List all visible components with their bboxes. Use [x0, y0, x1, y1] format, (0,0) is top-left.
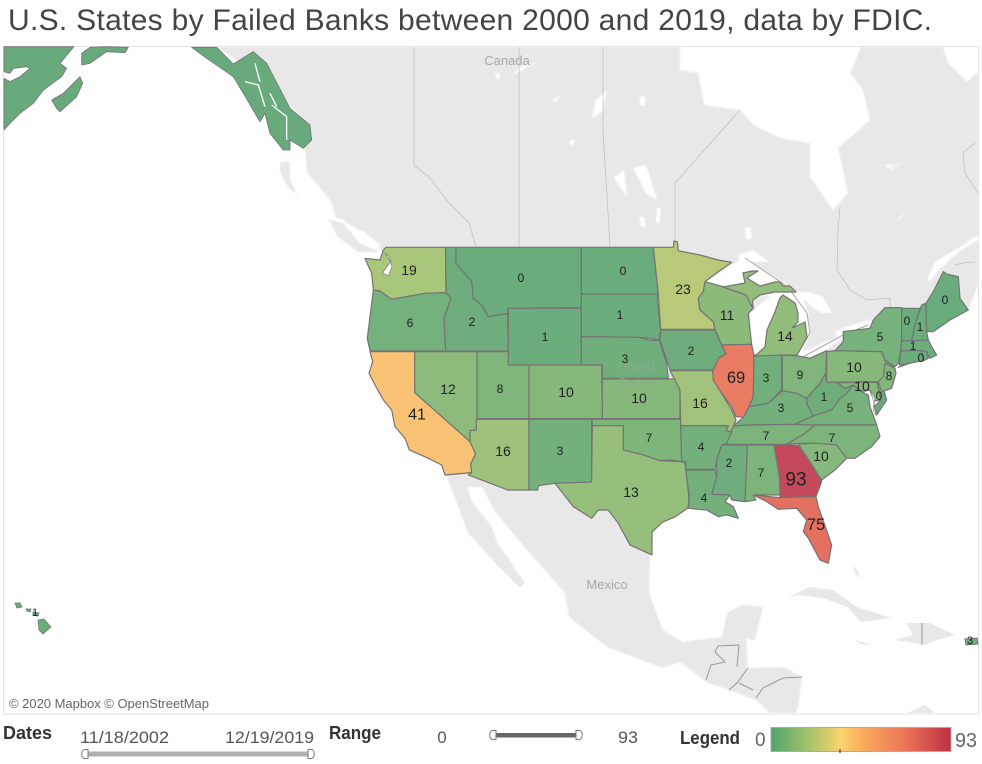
Michigan lower peninsula: [755, 295, 807, 356]
value labels per state: 10: [846, 359, 862, 375]
Maryland: [837, 382, 881, 401]
Virginia: [795, 385, 877, 425]
basemap: Caribbean islands: [788, 566, 955, 713]
Chesapeake Bay: [871, 391, 876, 415]
value labels per state: 14: [777, 328, 793, 344]
value labels per state: 3: [557, 444, 564, 458]
Kansas: [602, 379, 680, 419]
Kentucky: [733, 391, 813, 426]
Texas: [555, 426, 689, 555]
Washington: [365, 247, 446, 299]
Massachusetts: [901, 340, 937, 358]
Puget Sound: [383, 253, 392, 276]
Idaho: [444, 247, 508, 351]
value labels per state: 8: [886, 369, 893, 383]
value labels per state: 7: [763, 429, 770, 443]
value labels per state: 1: [617, 308, 624, 322]
value labels per state: 10: [854, 378, 870, 394]
Wisconsin: [698, 282, 753, 345]
Michigan: [723, 271, 807, 356]
control: dates filter: 12/19/2019: [225, 728, 314, 747]
basemap: Canadian lakes and bays: [328, 60, 978, 282]
West Virginia: [807, 373, 853, 416]
value labels per state: 4: [698, 440, 705, 454]
map labels: countries: Mexico: [586, 577, 628, 592]
map labels: countries: Canada: [484, 53, 531, 68]
Kodiak: [52, 77, 83, 112]
attribution: © 2020 Mapbox © OpenStreetMap: [9, 696, 209, 711]
Oklahoma: [592, 419, 682, 462]
New Jersey: [878, 363, 896, 392]
contiguous states, eastern group: [653, 241, 968, 563]
value labels per state: 41: [408, 406, 426, 424]
panhandle channels: [245, 63, 287, 140]
great lakes: [706, 258, 873, 358]
Montana: [456, 247, 581, 317]
value labels per state: 0: [918, 351, 925, 365]
Vermont: [902, 308, 920, 341]
basemap: Vancouver Island: [328, 218, 380, 252]
California: [369, 352, 476, 475]
Georgia: [774, 445, 822, 498]
basemap: province and country borders: [414, 47, 978, 698]
Florida: [753, 495, 832, 563]
Maine: [926, 272, 968, 332]
Nebraska: [581, 337, 668, 378]
value labels per state: 0: [876, 389, 883, 403]
value labels per state: 9: [797, 368, 804, 382]
control: range filter: Range: [329, 723, 381, 743]
legend: 93: [955, 730, 977, 752]
value labels per state: 0: [518, 271, 525, 285]
value labels per state: 7: [646, 431, 653, 445]
Nevada: [415, 352, 477, 442]
Hawaii: [15, 603, 51, 634]
Oregon: [367, 290, 451, 351]
value labels per state: 0: [942, 293, 949, 307]
value labels per state: 3: [967, 635, 973, 647]
Louisiana: [686, 470, 738, 518]
value labels per state: 75: [807, 516, 825, 534]
control: range filter: 93: [618, 728, 638, 747]
value labels per state: 4: [701, 491, 708, 505]
basemap: Haida Gwaii: [280, 162, 298, 195]
value labels per state: 16: [495, 443, 511, 459]
value labels per state: 10: [558, 384, 574, 400]
Iowa: [660, 330, 726, 370]
value labels per state: [32, 262, 973, 647]
value labels per state: 5: [847, 401, 854, 415]
New Mexico: [529, 419, 592, 490]
value labels per state: 0: [620, 264, 627, 278]
value labels per state: 6: [407, 316, 414, 330]
Arizona: [468, 419, 529, 490]
value labels per state: 23: [675, 281, 691, 297]
Rhode Island: [922, 351, 928, 361]
map labels: countries: States: [618, 375, 655, 390]
Alabama: [745, 445, 780, 502]
control: range filter: [329, 723, 638, 747]
title: U.S. States by Failed Banks between 2000 and 2019, data by FDIC.: [8, 4, 932, 37]
Alaska mainland: [4, 47, 74, 130]
Illinois: [713, 344, 754, 417]
value labels per state: 1: [542, 330, 549, 344]
value labels per state: 8: [497, 382, 504, 396]
basemap: Canada land: [217, 47, 978, 420]
value labels per state: 19: [401, 262, 417, 278]
South Carolina: [798, 443, 847, 480]
value labels per state: 3: [763, 371, 770, 385]
Alaska Kenai coast: [82, 47, 128, 65]
value labels per state: 2: [469, 315, 476, 329]
map labels: countries: [484, 53, 655, 592]
Alaska: [4, 47, 312, 150]
value labels per state: 11: [720, 307, 734, 323]
value labels per state: 10: [813, 448, 829, 464]
value labels per state: 3: [778, 401, 785, 415]
Mississippi: [712, 445, 747, 502]
map labels: countries: United: [617, 358, 655, 373]
control: dates filter: 11/18/2002: [80, 728, 169, 747]
Connecticut: [899, 351, 923, 365]
Pennsylvania: [827, 351, 894, 382]
value labels per state: 5: [877, 330, 884, 344]
North Dakota: [581, 247, 658, 294]
control: range filter: 0: [437, 728, 447, 747]
value labels per state: 12: [440, 381, 456, 397]
value labels per state: 3: [622, 352, 629, 366]
Utah: [477, 352, 529, 419]
control: dates filter: [3, 723, 314, 758]
Tennessee: [726, 424, 815, 444]
value labels per state: 69: [727, 369, 745, 387]
Colorado: [529, 365, 602, 419]
value labels per state: 13: [623, 484, 639, 500]
Long Island: [898, 361, 917, 367]
Wyoming: [508, 308, 581, 365]
value labels per state: 1: [910, 339, 917, 353]
Alaska panhandle: [192, 47, 312, 150]
legend: Legend: [680, 728, 740, 748]
value labels per state: 93: [785, 470, 807, 490]
value labels per state: 0: [904, 314, 911, 328]
value labels per state: 7: [829, 431, 836, 445]
value labels per state: 10: [631, 390, 647, 406]
value labels per state: 16: [692, 395, 708, 411]
Michigan upper peninsula: [723, 271, 796, 307]
Arkansas: [681, 426, 732, 469]
North Carolina: [787, 425, 880, 458]
South Dakota: [581, 294, 661, 340]
value labels per state: 2: [726, 456, 733, 470]
value labels per state: 7: [758, 466, 765, 480]
New Hampshire: [912, 303, 928, 341]
value labels per state: 1: [917, 320, 924, 334]
legend: [680, 728, 977, 753]
Delaware and Delmarva: [874, 382, 887, 415]
Puerto Rico: [965, 638, 978, 645]
legend: 0: [755, 730, 766, 751]
value labels per state: 1: [821, 390, 828, 404]
value labels per state: 1: [32, 607, 38, 619]
Minnesota: [653, 241, 732, 329]
contiguous states, western group: [365, 247, 689, 555]
basemap: Mexico and Central America land: [447, 440, 802, 713]
Indiana: [749, 355, 782, 407]
basemap land and water: [217, 47, 978, 713]
Missouri: [670, 371, 736, 432]
control: dates filter: Dates: [3, 723, 52, 743]
New York: [835, 308, 902, 367]
value labels per state: 2: [688, 344, 695, 358]
Ohio: [782, 351, 827, 398]
